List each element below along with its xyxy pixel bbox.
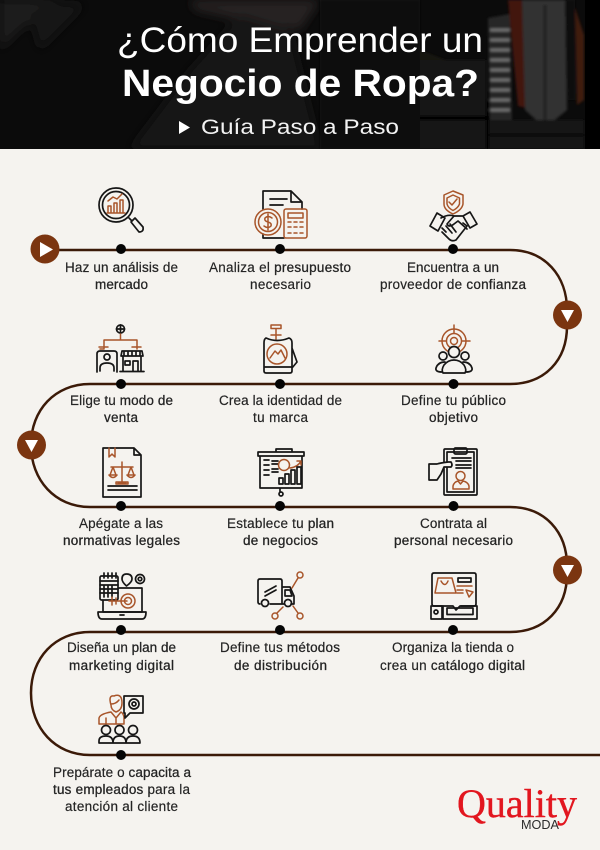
label: step 10: marketing digital bbox=[69, 658, 174, 673]
label: step 11 bbox=[220, 640, 340, 673]
label: step 4: venta bbox=[104, 410, 138, 425]
icon: trainer and employees bbox=[99, 695, 143, 743]
icon: budget document, coin and calculator bbox=[255, 191, 307, 238]
icon: business plan board bbox=[258, 449, 304, 496]
icon: clipboard and hand bbox=[429, 448, 477, 495]
label: step 6: objetivo bbox=[429, 410, 478, 425]
label: step 7: normativas legales bbox=[63, 533, 180, 548]
icon: digital marketing laptop bbox=[98, 573, 146, 619]
title bbox=[117, 21, 483, 105]
label: step 5 bbox=[219, 393, 342, 425]
label: step 11: Define tus métodos bbox=[220, 640, 340, 655]
icon: hang tag bbox=[264, 325, 297, 373]
label: step 1: Haz un análisis de bbox=[65, 260, 178, 275]
timeline start marker: play button bbox=[30, 234, 60, 264]
title: ¿Cómo Emprender un bbox=[117, 21, 483, 60]
label: step 9: Contrata al bbox=[420, 516, 487, 531]
icon: target audience bbox=[436, 325, 472, 373]
label: step 10: Diseña un plan de bbox=[67, 640, 176, 655]
label: step 6: Define tu público bbox=[401, 393, 506, 408]
label: step 13: atención al cliente bbox=[65, 799, 178, 814]
timeline dots bbox=[116, 244, 458, 760]
label: step 4: Elige tu modo de bbox=[70, 393, 173, 408]
label: step 5: tu marca bbox=[253, 410, 308, 425]
label: step 9 bbox=[394, 516, 513, 548]
label: step 7 bbox=[63, 516, 180, 548]
label: step 1: mercado bbox=[95, 277, 148, 292]
label: step 8: Establece tu plan bbox=[227, 516, 334, 531]
icon: magnifier with chart bbox=[99, 188, 143, 232]
logo: Quality Moda: MODA bbox=[521, 817, 559, 832]
label: step 8 bbox=[227, 516, 334, 548]
logo: Quality Moda: Quality bbox=[457, 781, 577, 826]
timeline path bbox=[31, 250, 600, 755]
label: step 7: Apégate a las bbox=[79, 516, 163, 531]
label: step 12: Organiza la tienda o bbox=[392, 640, 514, 655]
icon: online store catalogue bbox=[431, 573, 477, 619]
label: step 10 bbox=[67, 640, 176, 673]
label: step 1 bbox=[65, 260, 178, 292]
label: step 2: Analiza el presupuesto bbox=[209, 260, 351, 275]
label: step 3 bbox=[380, 260, 526, 292]
label: step 13: Prepárate o capacita a bbox=[53, 765, 191, 780]
label: step 13 bbox=[53, 765, 191, 814]
label: step 5: Crea la identidad de bbox=[219, 393, 342, 408]
label: step 11: de distribución bbox=[234, 658, 327, 673]
direction marker right 1 bbox=[553, 300, 582, 330]
label: step 12 bbox=[380, 640, 525, 673]
direction marker right 2 bbox=[553, 556, 582, 584]
header panel bbox=[0, 0, 600, 149]
subtitle: Guía Paso a Paso bbox=[201, 116, 399, 139]
label: step 9: personal necesario bbox=[394, 533, 513, 548]
direction marker left bbox=[17, 430, 46, 460]
label: step 3: proveedor de confianza bbox=[380, 277, 526, 292]
title: Negocio de Ropa? bbox=[122, 63, 479, 105]
icon: shield and handshake bbox=[430, 191, 477, 241]
label: step 2 bbox=[209, 260, 351, 292]
icon: delivery truck network bbox=[258, 572, 303, 619]
label: step 2: necesario bbox=[250, 277, 311, 292]
icon: sales channels bbox=[97, 325, 144, 372]
label: step 8: de negocios bbox=[243, 533, 318, 548]
label: step 13: tus empleados para la bbox=[53, 782, 190, 797]
label: step 12: crea un catálogo digital bbox=[380, 658, 525, 673]
label: step 6 bbox=[401, 393, 506, 425]
icon: legal document bbox=[103, 448, 141, 497]
label: step 4 bbox=[70, 393, 173, 425]
label: step 3: Encuentra a un bbox=[407, 260, 499, 275]
